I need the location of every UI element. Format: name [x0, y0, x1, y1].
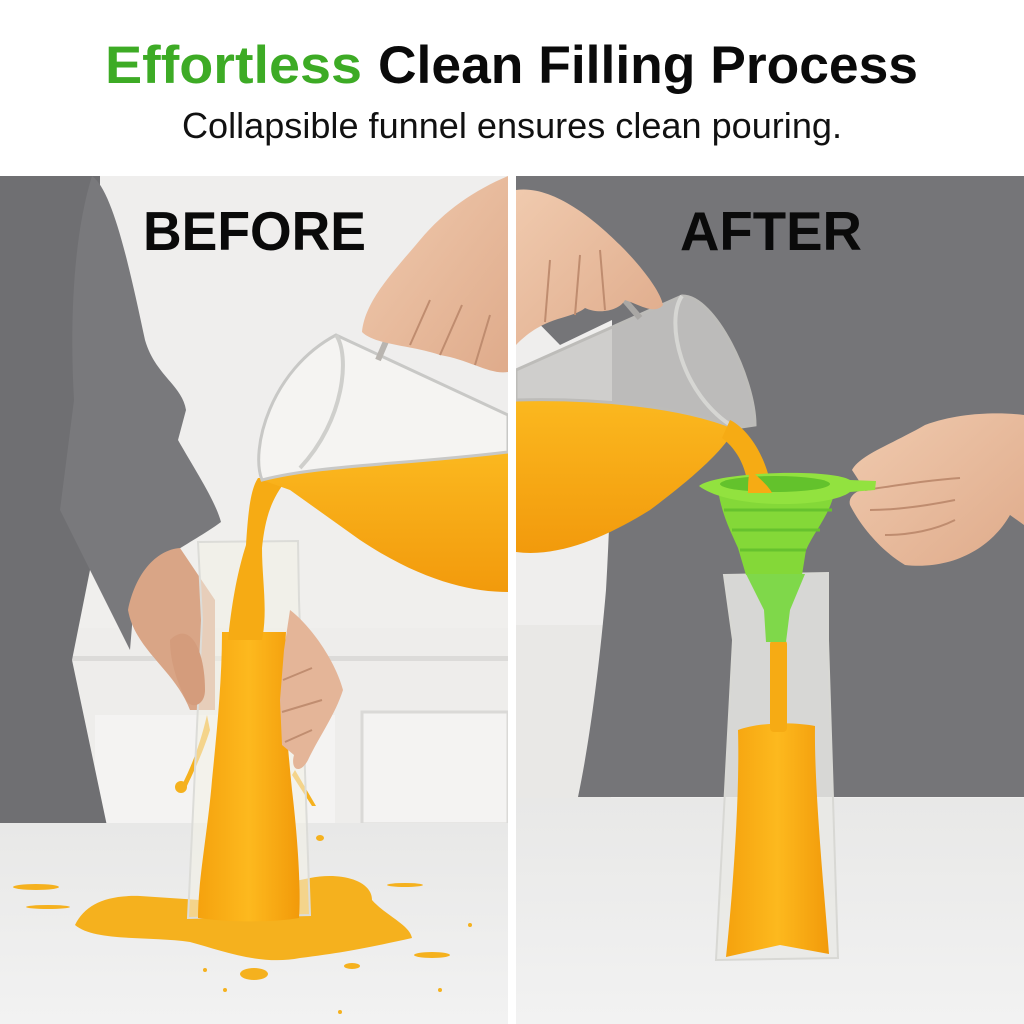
cabinet: [516, 625, 611, 800]
juice stream into pouch: [770, 640, 787, 732]
pouring hand: [362, 176, 508, 372]
person torso: [0, 176, 107, 826]
wall background: [100, 176, 508, 520]
pouch: [716, 573, 838, 960]
juice spill: [13, 715, 472, 1014]
label: after: AFTER: [680, 200, 862, 262]
title: [105, 36, 918, 95]
shirt sleeve: [60, 176, 221, 650]
holding hand: [850, 413, 1024, 566]
title: Clean Filling Process: [378, 36, 918, 95]
counter: [0, 823, 508, 1024]
pour stream: [726, 420, 768, 476]
holding forearm: [128, 548, 215, 710]
funnel: [699, 470, 876, 642]
panel: after: [516, 176, 1024, 1024]
kitchen counter shelf: [78, 626, 508, 628]
cabinets: [50, 628, 508, 828]
panel: before: [0, 176, 508, 1024]
pouch: [188, 541, 310, 918]
pour stream: [228, 478, 282, 640]
pitcher: [516, 290, 755, 553]
fingers: [280, 610, 343, 769]
label: before: BEFORE: [143, 200, 366, 262]
juice in pouch: [726, 723, 829, 957]
holding hand: [170, 634, 205, 705]
subtitle: Collapsible funnel ensures clean pouring.: [182, 105, 842, 146]
title: Effortless: [105, 36, 362, 95]
pitcher: [259, 312, 508, 592]
pouring hand: [516, 189, 663, 345]
juice in pouch: [198, 632, 300, 921]
person shirt: [516, 176, 1024, 797]
counter: [516, 798, 1024, 1024]
wall background: [516, 320, 1024, 798]
